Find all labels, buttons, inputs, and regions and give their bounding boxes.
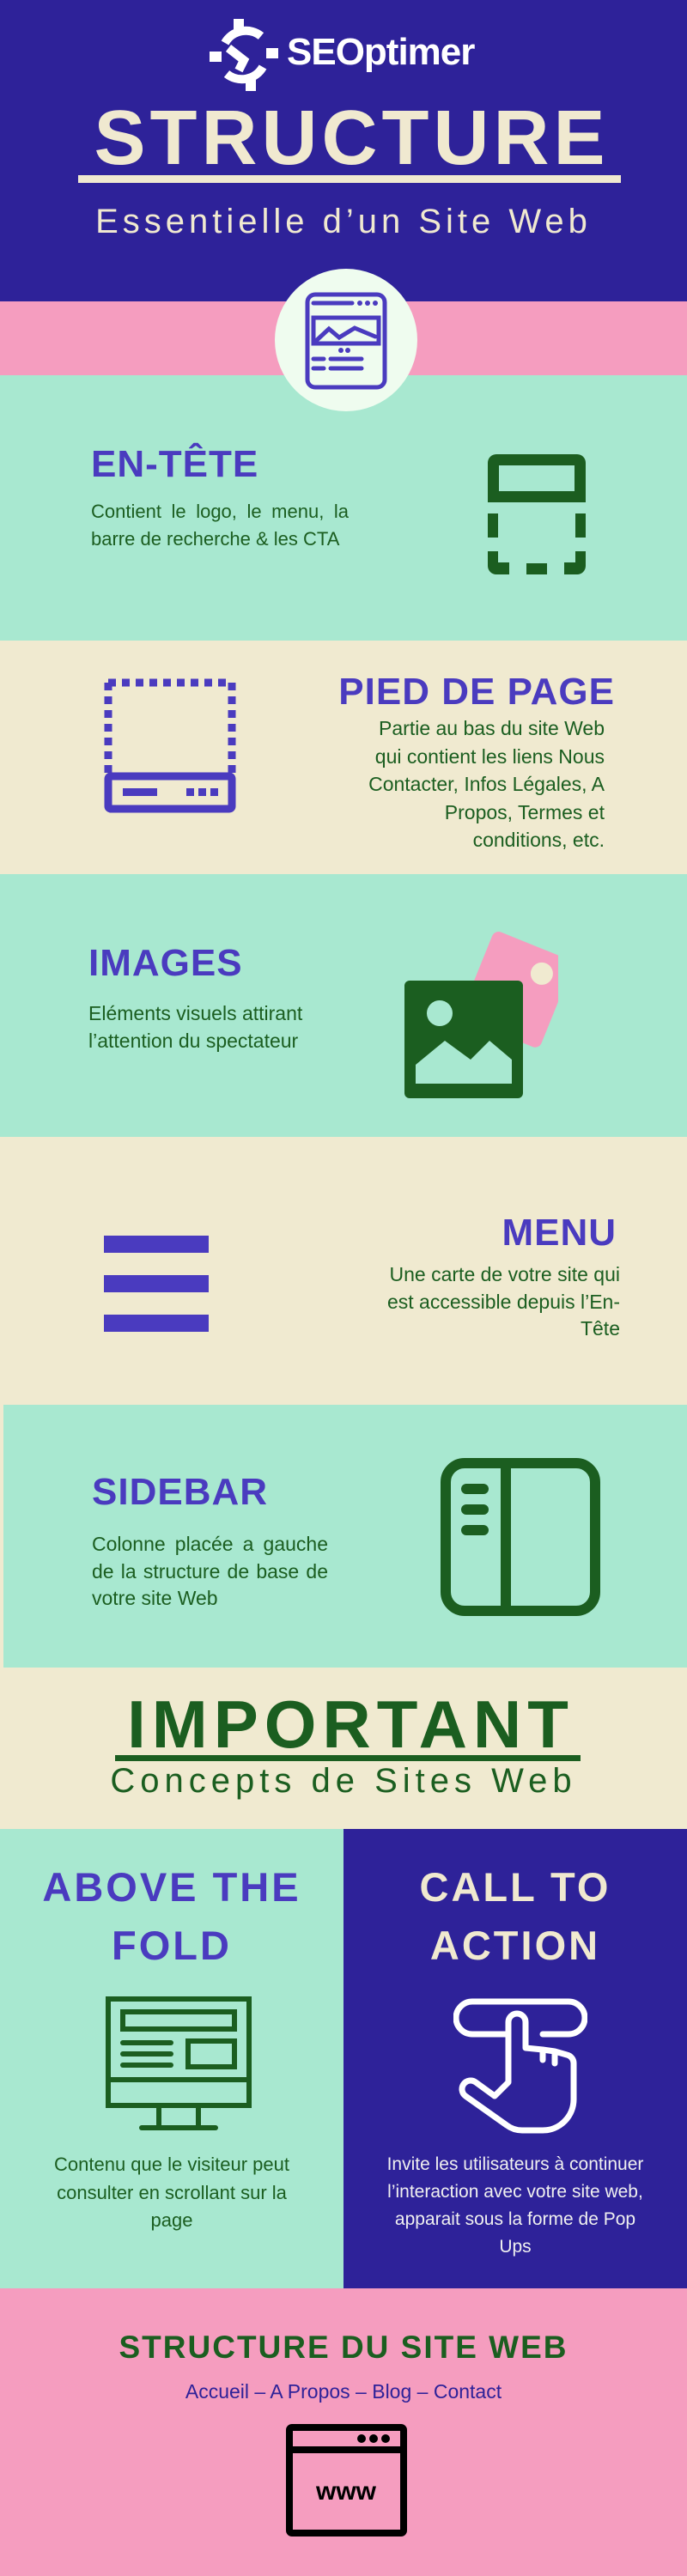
text: Colonne placée a gauche de la structure de base de votre site Web — [92, 1533, 328, 1609]
heading: STRUCTURE DU SITE WEB — [119, 2330, 568, 2365]
heading: MENU — [502, 1212, 617, 1254]
panel: en-tete — [0, 375, 687, 641]
logo — [210, 19, 475, 91]
panel: images — [0, 874, 687, 1137]
text: Contenu que le visiteur peut consulter en scrollant sur la page — [54, 2154, 289, 2231]
heading: ACTION — [430, 1923, 600, 1968]
heading: PIED DE PAGE — [338, 671, 615, 713]
panel: pied de page — [0, 641, 687, 874]
heading: IMAGES — [88, 942, 243, 984]
heading: FOLD — [112, 1923, 232, 1968]
icon: hand click — [453, 1999, 587, 2133]
text: Eléments visuels attirant l’attention du spectateur — [88, 1002, 302, 1051]
heading: CALL TO — [420, 1864, 611, 1910]
heading: EN-TÊTE — [91, 443, 258, 485]
icon: hamburger — [104, 1236, 209, 1332]
text: Une carte de votre site qui est accessible depuis l’En-Tête — [387, 1263, 620, 1340]
title: STRUCTURE — [94, 95, 610, 181]
icon: www window — [286, 2424, 407, 2537]
pink band — [0, 301, 687, 375]
icon: monitor — [106, 1996, 252, 2130]
circle icon: browser — [275, 269, 417, 411]
icon: images — [404, 932, 558, 1098]
panel: header — [0, 0, 687, 301]
text: Partie au bas du site Web qui contient les liens Nous Contacter, Infos Légales, A Propos, Termes et conditions, etc. — [368, 717, 605, 851]
panel: important heading — [0, 1668, 687, 1829]
icon: sidebar layout — [441, 1458, 600, 1616]
icon: www window: www — [315, 2477, 377, 2506]
icon: footer layout — [105, 678, 235, 812]
heading: ABOVE THE — [42, 1864, 301, 1910]
panel: menu — [0, 1137, 687, 1405]
panel: call to action — [344, 1829, 687, 2288]
panel: footer — [0, 2288, 687, 2576]
panel: sidebar — [3, 1405, 687, 1668]
title: IMPORTANT — [127, 1686, 575, 1762]
logo text: SEOptimer — [287, 31, 474, 73]
heading — [420, 1864, 611, 1968]
subtitle: Concepts de Sites Web — [110, 1762, 577, 1800]
text: Invite les utilisateurs à continuer l’interaction avec votre site web, apparait sous la forme de Pop Ups — [387, 2154, 643, 2257]
panel: above the fold — [0, 1829, 344, 2288]
heading: SIDEBAR — [92, 1471, 268, 1513]
icon: gear — [210, 19, 278, 91]
icon: header layout — [488, 454, 586, 574]
text: Contient le logo, le menu, la barre de recherche & les CTA — [91, 501, 349, 550]
subtitle: Essentielle d’un Site Web — [95, 203, 592, 240]
heading — [42, 1864, 301, 1968]
links text: Accueil – A Propos – Blog – Contact — [185, 2380, 502, 2403]
